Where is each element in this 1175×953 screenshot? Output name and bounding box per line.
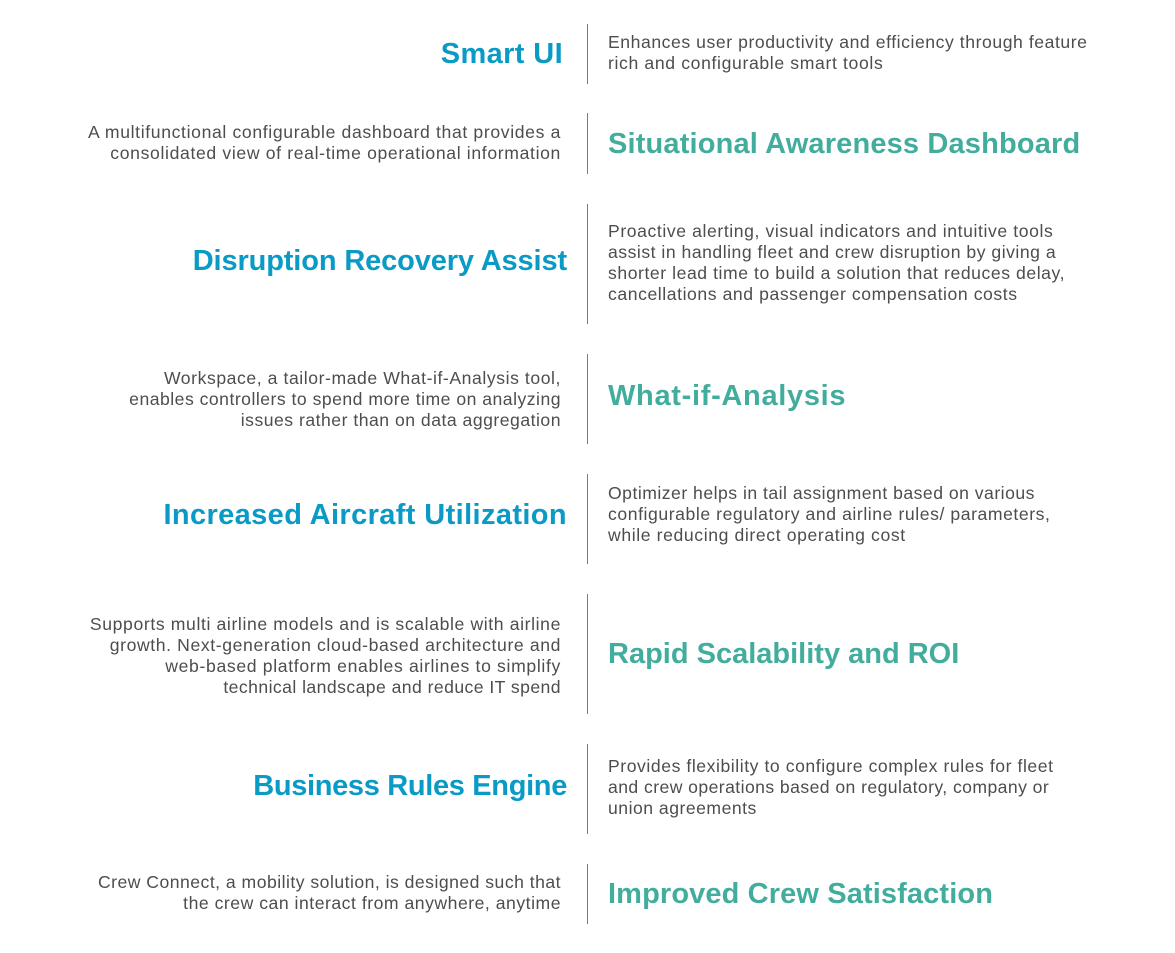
heading: increased aircraft utilization: Increased Aircraft Utilization (163, 499, 567, 531)
text: crew description (98, 872, 561, 913)
heading: improved crew satisfaction: Improved Crew Satisfaction (608, 878, 993, 910)
divider: dashboard (587, 113, 588, 174)
divider: rules engine (587, 744, 588, 834)
text: rules engine description: union agreements (608, 798, 757, 818)
text: scalability description: technical landscape and reduce IT spend (223, 677, 561, 697)
text: utilization description: Optimizer helps in tail assignment based on various (608, 483, 1035, 503)
divider: scalability (587, 594, 588, 714)
heading: business rules engine: Business Rules Engine (253, 770, 567, 802)
text: scalability description: growth. Next-generation cloud-based architecture and (110, 635, 561, 655)
text: rules engine description: Provides flexibility to configure complex rules for fleet (608, 756, 1054, 776)
divider: what-if (587, 354, 588, 444)
text: utilization description: configurable regulatory and airline rules/ parameters, (608, 504, 1050, 524)
text: disruption description: shorter lead time to build a solution that reduces delay, (608, 263, 1065, 283)
text: dashboard description (88, 122, 561, 163)
heading: rapid scalability and roi: Rapid Scalability and ROI (608, 638, 959, 670)
text: disruption description: Proactive alerting, visual indicators and intuitive tools (608, 221, 1053, 241)
text: what-if description: enables controllers to spend more time on analyzing (129, 389, 561, 409)
text: smart ui description (608, 32, 1088, 73)
text: disruption description (608, 221, 1065, 304)
text: disruption description: cancellations and passenger compensation costs (608, 284, 1018, 304)
text: smart ui description: rich and configurable smart tools (608, 53, 883, 73)
text: scalability description: Supports multi airline models and is scalable with airline (90, 614, 561, 634)
text: dashboard description: A multifunctional configurable dashboard that provides a (88, 122, 561, 142)
text: disruption description: assist in handling fleet and crew disruption by giving a (608, 242, 1056, 262)
divider: smart ui (587, 24, 588, 84)
divider: disruption (587, 204, 588, 324)
text: what-if description (129, 368, 561, 430)
text: what-if description: Workspace, a tailor-made What-if-Analysis tool, (164, 368, 561, 388)
text: crew description: the crew can interact from anywhere, anytime (183, 893, 561, 913)
text: utilization description: while reducing direct operating cost (608, 525, 906, 545)
text: scalability description (90, 614, 561, 697)
heading: situational awareness dashboard: Situational Awareness Dashboard (608, 128, 1080, 160)
text: crew description: Crew Connect, a mobility solution, is designed such that (98, 872, 561, 892)
divider: utilization (587, 474, 588, 564)
heading: smart ui: Smart UI (441, 38, 563, 70)
divider: crew (587, 864, 588, 924)
text: rules engine description: and crew operations based on regulatory, company or (608, 777, 1049, 797)
text: utilization description (608, 483, 1050, 545)
text: dashboard description: consolidated view of real-time operational information (110, 143, 561, 163)
text: smart ui description: Enhances user productivity and efficiency through feature (608, 32, 1088, 52)
heading: what-if-analysis: What-if-Analysis (608, 380, 846, 412)
text: what-if description: issues rather than on data aggregation (241, 410, 561, 430)
text: scalability description: web-based platform enables airlines to simplify (165, 656, 561, 676)
text: rules engine description (608, 756, 1054, 818)
heading: disruption recovery assist: Disruption Recovery Assist (193, 245, 567, 277)
